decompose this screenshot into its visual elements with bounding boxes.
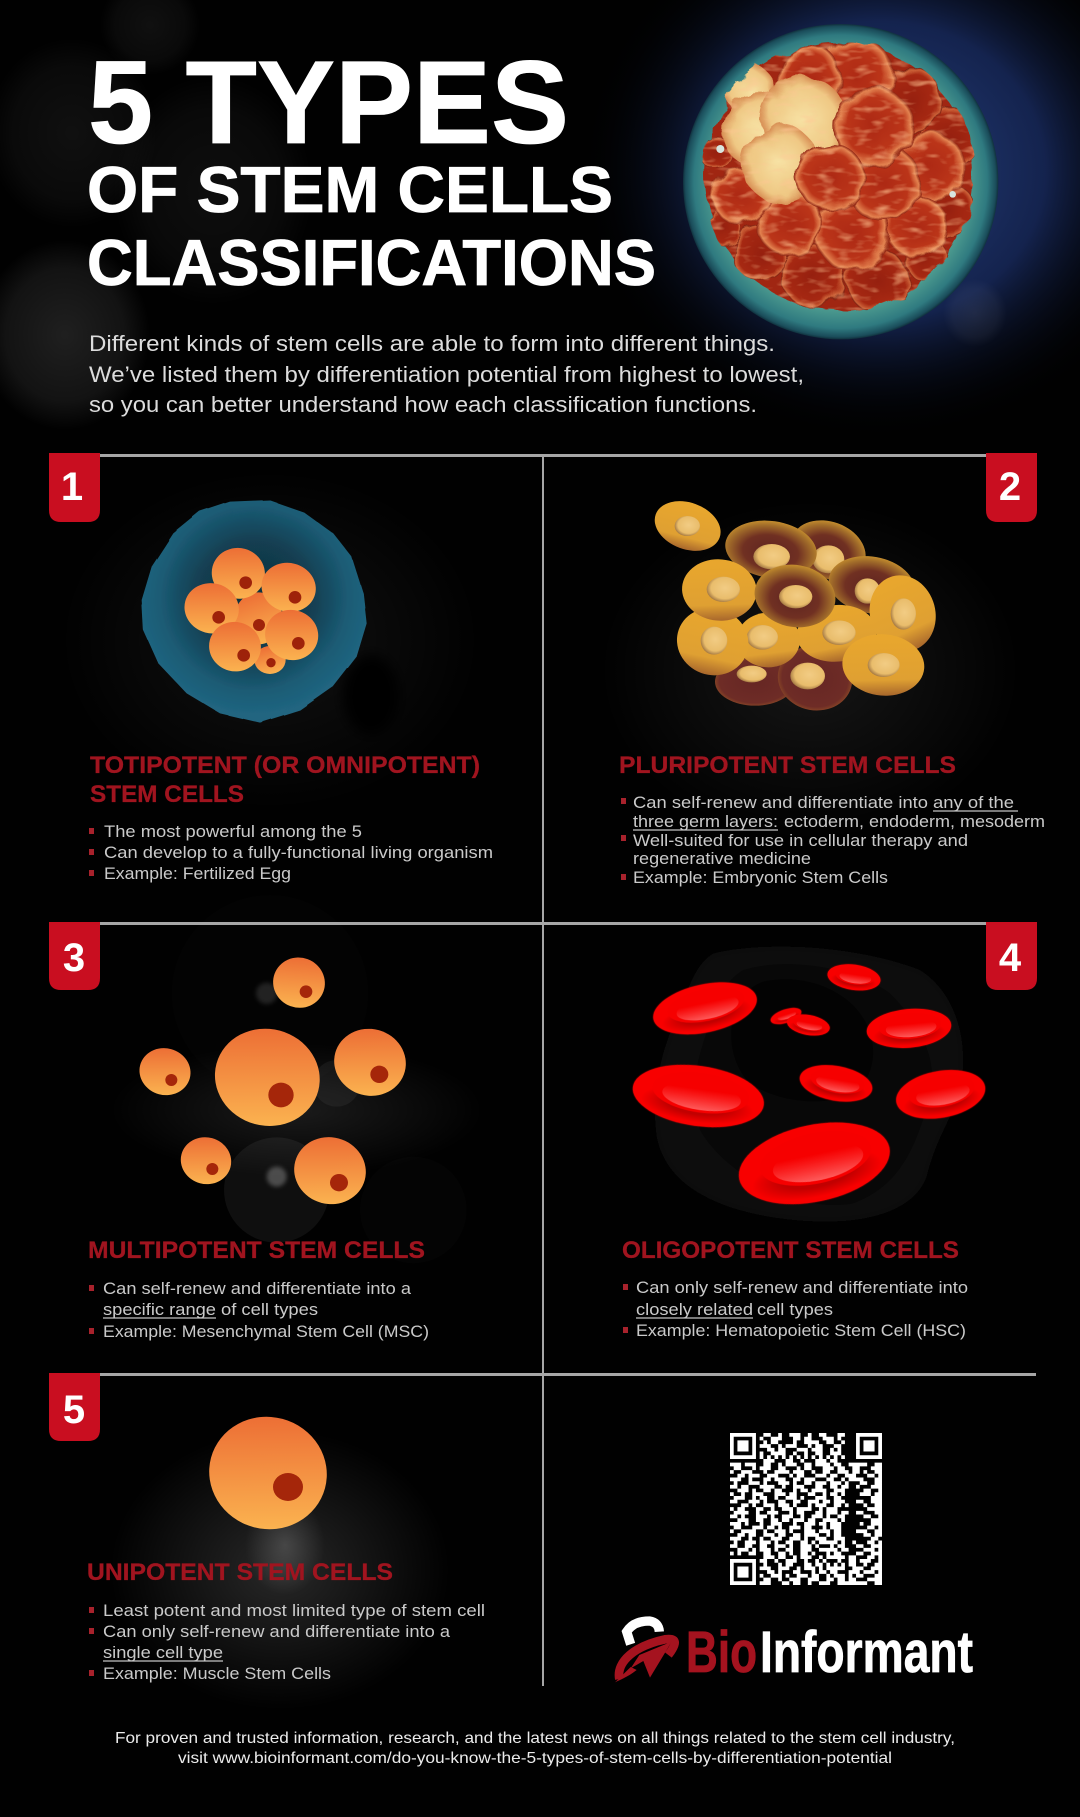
badge 4 bbox=[986, 922, 1037, 990]
bullet list: Example: Embryonic Stem Cells bbox=[633, 868, 888, 887]
bullet list: Example: Hematopoietic Stem Cell (HSC) bbox=[636, 1321, 966, 1340]
bullet list: The most powerful among the 5 bbox=[104, 822, 362, 841]
bullet list: Least potent and most limited type of stem cell bbox=[103, 1601, 485, 1620]
heading: PLURIPOTENT STEM CELLS bbox=[619, 752, 956, 779]
panel 5: unipotent bbox=[49, 1373, 485, 1710]
badge 2: 2 bbox=[999, 465, 1021, 509]
illustration: embryonic stem cell cluster bbox=[600, 492, 1020, 840]
title bbox=[87, 37, 656, 299]
illustration: mesenchymal stem cells bbox=[110, 895, 483, 1263]
illustration: fertilized egg bbox=[60, 470, 480, 810]
title: CLASSIFICATIONS bbox=[87, 226, 656, 299]
BioInformant logo bbox=[615, 1620, 973, 1685]
panel 1: totipotent bbox=[49, 453, 493, 883]
illustration: red blood cells bbox=[629, 947, 989, 1222]
title: 5 TYPES bbox=[88, 37, 569, 169]
intro text: so you can better understand how each classification functions. bbox=[89, 392, 757, 417]
header background: blue glow and ghost cells bbox=[0, 0, 1080, 440]
intro text bbox=[89, 331, 804, 417]
footer text: visit www.bioinformant.com/do-you-know-the-5-types-of-stem-cells-by-differentiation-potential bbox=[178, 1750, 892, 1767]
bullet list: cell types bbox=[757, 1300, 833, 1319]
heading: STEM CELLS bbox=[90, 781, 244, 808]
panel 2: pluripotent bbox=[600, 453, 1045, 887]
heading: UNIPOTENT STEM CELLS bbox=[87, 1559, 393, 1586]
QR code bbox=[730, 1433, 882, 1585]
badge 5: 5 bbox=[63, 1388, 85, 1432]
badge 3: 3 bbox=[63, 936, 85, 980]
bullet list: ectoderm, endoderm, mesoderm bbox=[784, 812, 1045, 831]
illustration: muscle stem cell bbox=[110, 1404, 450, 1710]
panel 4: oligopotent bbox=[622, 922, 1037, 1340]
bullet list bbox=[89, 1601, 485, 1683]
bullet list: of cell types bbox=[221, 1300, 318, 1319]
badge 4: 4 bbox=[999, 936, 1022, 980]
bullet list bbox=[89, 822, 493, 883]
footer text bbox=[115, 1730, 955, 1767]
intro text: We’ve listed them by differentiation potential from highest to lowest, bbox=[89, 362, 804, 387]
bullet list: Can only self-renew and differentiate into bbox=[636, 1278, 968, 1297]
bullet list bbox=[89, 1279, 429, 1341]
bullet list: Example: Muscle Stem Cells bbox=[103, 1664, 331, 1683]
footer text: For proven and trusted information, research, and the latest news on all things related to the stem cell industry, bbox=[115, 1730, 955, 1747]
heading bbox=[90, 752, 480, 808]
logo wordmark bbox=[686, 1620, 973, 1685]
badge 1: 1 bbox=[61, 465, 83, 509]
title: OF STEM CELLS bbox=[87, 153, 613, 226]
bullet list: Well-suited for use in cellular therapy and bbox=[633, 831, 968, 850]
logo wordmark: Informant bbox=[760, 1620, 973, 1685]
badge 3 bbox=[49, 922, 100, 990]
bullet list: regenerative medicine bbox=[633, 849, 811, 868]
bullet list: three germ layers: bbox=[633, 812, 778, 831]
bullet list: single cell type bbox=[103, 1643, 223, 1662]
logo wordmark: Bio bbox=[686, 1620, 757, 1685]
bullet list: closely related bbox=[636, 1300, 753, 1319]
badge 5 bbox=[49, 1373, 100, 1441]
bullet list: Can develop to a fully-functional living organism bbox=[104, 843, 493, 862]
bullet list bbox=[621, 793, 1045, 887]
bullet list: any of the bbox=[933, 793, 1014, 812]
bullet list: Can only self-renew and differentiate into a bbox=[103, 1622, 451, 1641]
badge 1 bbox=[49, 453, 100, 522]
intro text: Different kinds of stem cells are able to form into different things. bbox=[89, 331, 775, 356]
heading: MULTIPOTENT STEM CELLS bbox=[88, 1237, 425, 1264]
logo icon bbox=[615, 1621, 675, 1682]
bullet list: Example: Fertilized Egg bbox=[104, 864, 291, 883]
badge 2 bbox=[986, 453, 1037, 522]
bullet list: Example: Mesenchymal Stem Cell (MSC) bbox=[103, 1322, 429, 1341]
grid divider lines bbox=[100, 454, 1036, 1686]
bullet list: specific range bbox=[103, 1300, 216, 1319]
heading: TOTIPOTENT (OR OMNIPOTENT) bbox=[90, 752, 480, 779]
illustration: blastocyst stem cell sphere bbox=[683, 24, 998, 339]
bullet list: Can self-renew and differentiate into a bbox=[103, 1279, 412, 1298]
panel 3: multipotent bbox=[49, 895, 483, 1341]
heading: OLIGOPOTENT STEM CELLS bbox=[622, 1237, 959, 1264]
bullet list: Can self-renew and differentiate into bbox=[633, 793, 928, 812]
bullet list bbox=[623, 1278, 968, 1340]
